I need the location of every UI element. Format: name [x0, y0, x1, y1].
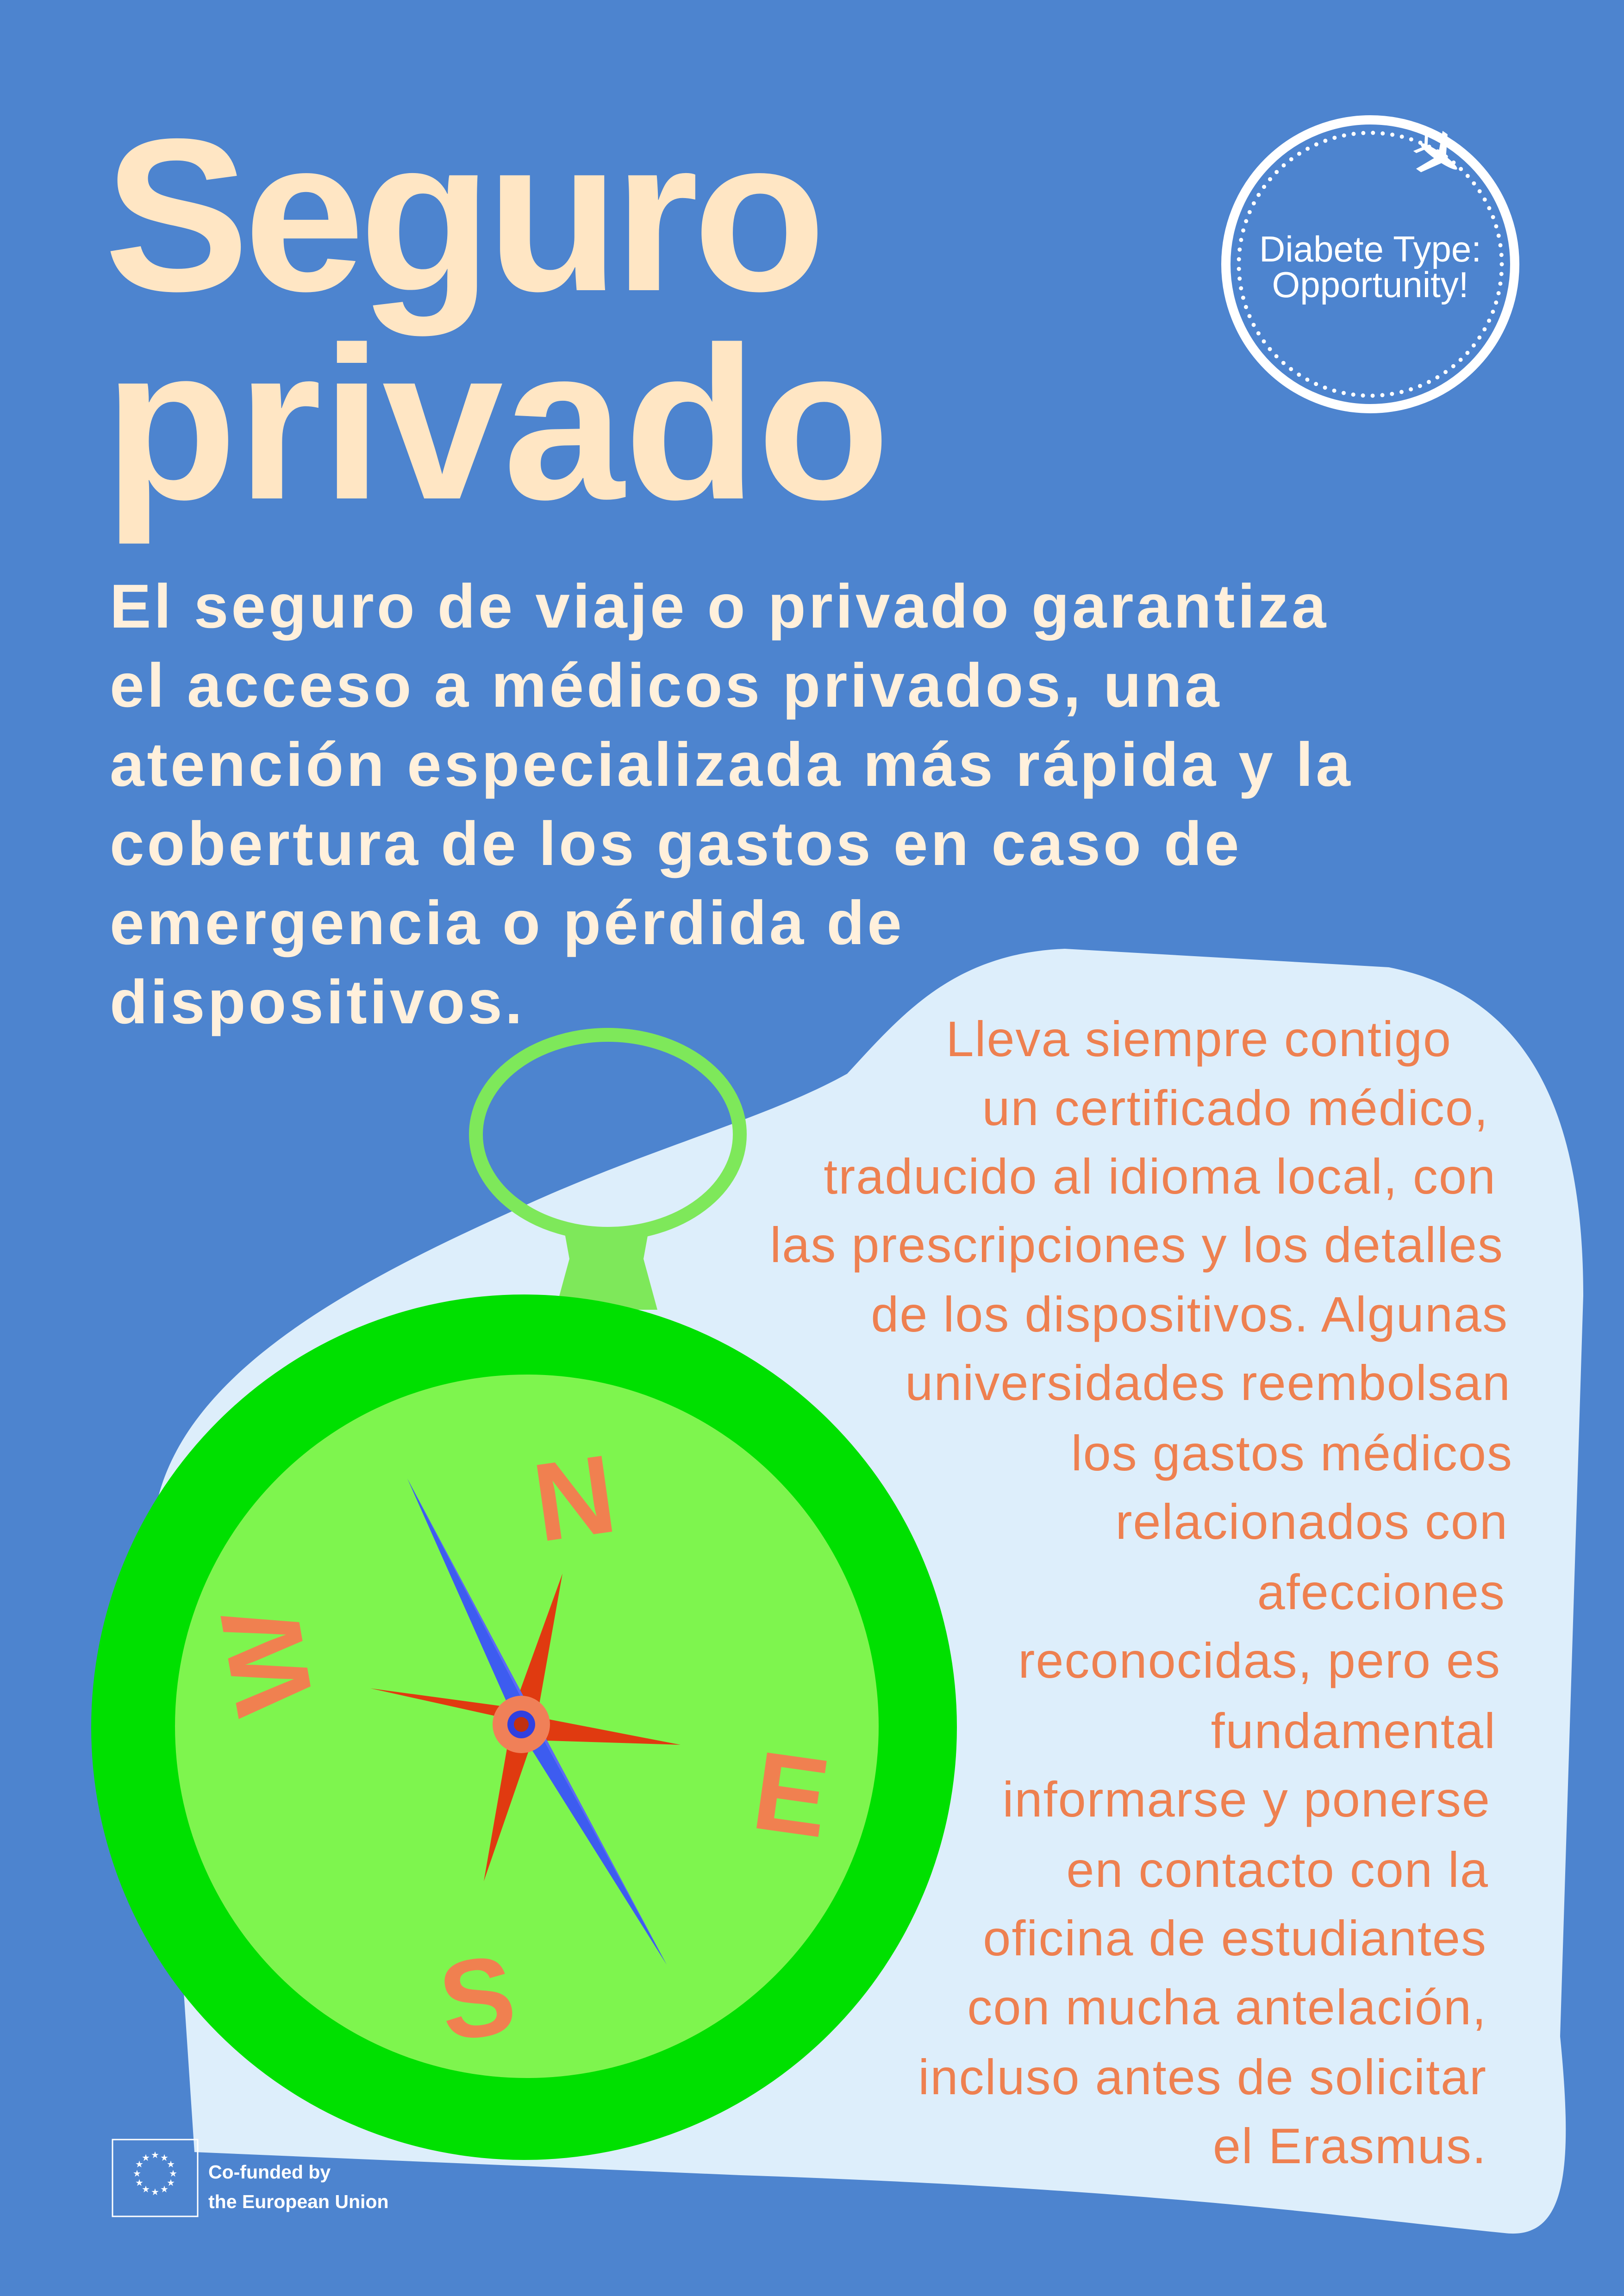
tip text: de los dispositivos. Algunas — [871, 1286, 1508, 1342]
star needle — [370, 1574, 681, 1881]
compass letters: W — [197, 1599, 337, 1724]
title — [104, 106, 937, 523]
icon: plane — [1406, 124, 1470, 188]
compass letters: N — [526, 1431, 623, 1565]
intro text: El seguro de viaje o privado garantiza — [110, 572, 1329, 641]
EU logo: ★ — [142, 2184, 150, 2195]
EU logo: ★ — [151, 2186, 159, 2197]
EU logo — [112, 2139, 399, 2217]
EU logo: ★ — [151, 2149, 159, 2160]
tip text: Lleva siempre contigo — [946, 1011, 1452, 1067]
intro text: emergencia o pérdida de — [110, 889, 905, 958]
intro text: dispositivos. — [110, 968, 525, 1037]
intro text: el acceso a médicos privados, una — [110, 651, 1222, 720]
tip text: en contacto con la — [1066, 1842, 1489, 1898]
tip text: las prescripciones y los detalles — [770, 1217, 1504, 1273]
EU logo: ★ — [167, 2159, 175, 2170]
EU logo: ★ — [133, 2168, 141, 2179]
EU logo: ★ — [135, 2177, 144, 2188]
compass ring — [476, 1035, 740, 1234]
tip text: oficina de estudiantes — [983, 1910, 1487, 1966]
badge — [1213, 106, 1537, 430]
compass letters — [197, 1431, 837, 2065]
EU logo: Co-funded by — [208, 2161, 331, 2183]
tip text: con mucha antelación, — [967, 1979, 1487, 2035]
title: privado — [104, 302, 890, 545]
tip text: fundamental — [1211, 1703, 1496, 1759]
intro text: cobertura de los gastos en caso de — [110, 809, 1242, 878]
tip text: informarse y ponerse — [1003, 1771, 1491, 1827]
tip text: el Erasmus. — [1213, 2118, 1487, 2174]
EU logo: ★ — [160, 2184, 169, 2195]
tip text: traducido al idioma local, con — [824, 1148, 1496, 1204]
EU logo: ★ — [142, 2152, 150, 2163]
EU logo: ★ — [135, 2159, 144, 2170]
compass letters: S — [432, 1931, 523, 2065]
tip text: universidades reembolsan — [905, 1355, 1511, 1411]
tip text: afecciones — [1257, 1564, 1505, 1620]
tip text: relacionados con — [1115, 1493, 1508, 1549]
EU logo: the European Union — [208, 2191, 389, 2212]
tip text: reconocidas, pero es — [1018, 1632, 1501, 1688]
intro text — [110, 567, 1353, 1042]
tip text: un certificado médico, — [982, 1080, 1489, 1136]
badge: Opportunity! — [1272, 264, 1468, 305]
EU logo: ★ — [167, 2177, 175, 2188]
EU logo: ★ — [169, 2168, 177, 2179]
intro text: atención especializada más rápida y la — [110, 730, 1353, 799]
EU logo: ★ — [160, 2152, 169, 2163]
tip text: incluso antes de solicitar — [918, 2049, 1487, 2105]
compass — [69, 1018, 995, 2175]
compass letters: E — [746, 1728, 837, 1861]
tip text: los gastos médicos — [1071, 1425, 1513, 1481]
badge: Diabete Type: — [1259, 229, 1481, 269]
title: Seguro — [104, 93, 820, 336]
